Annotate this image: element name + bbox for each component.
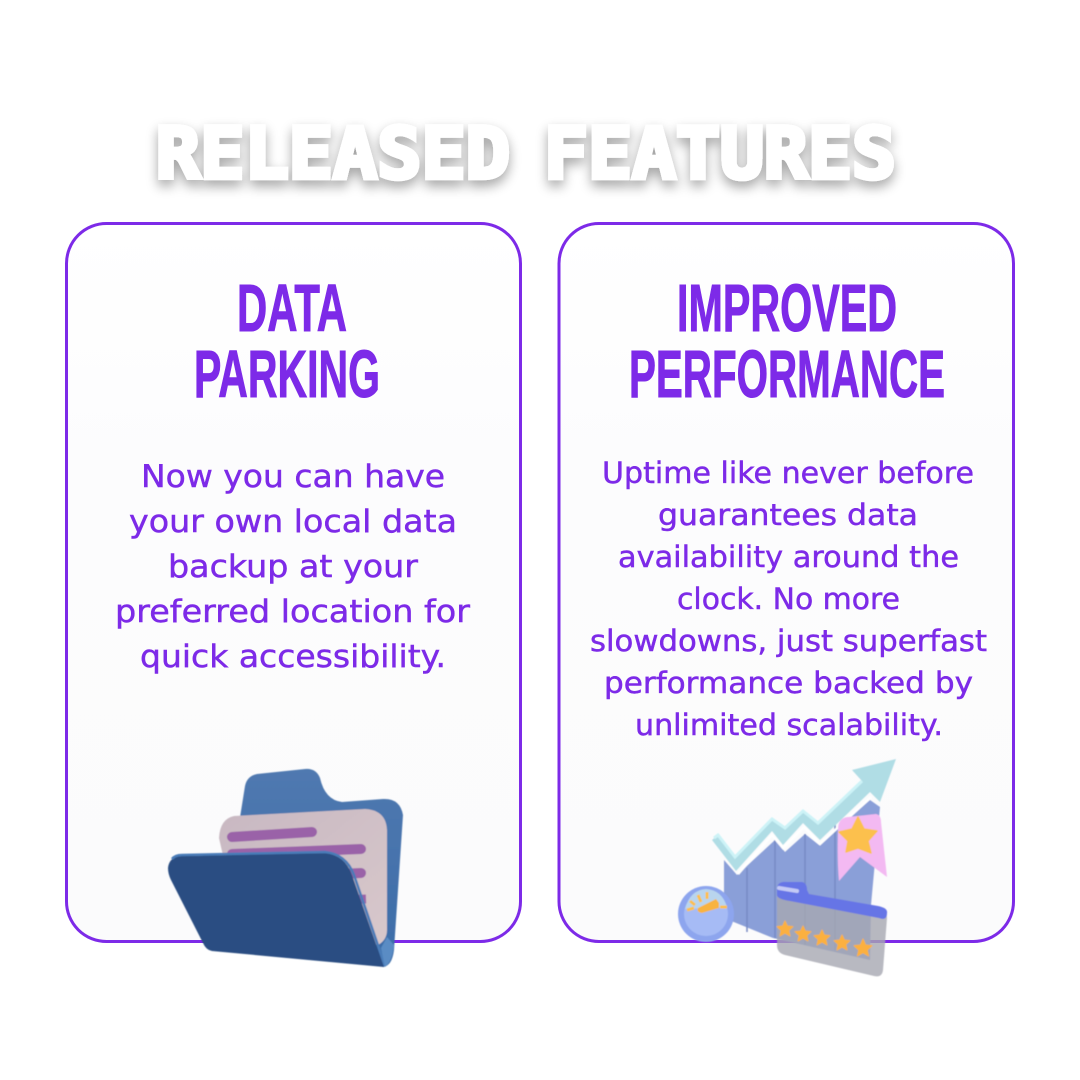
heading: data parking: DATA (237, 271, 347, 346)
text block: improved performance description: unlimited scalability. (635, 708, 943, 742)
heading: data parking (194, 271, 380, 412)
text block: improved performance description: availability around the (618, 540, 959, 574)
rating stars (777, 921, 872, 956)
icon: growth chart (678, 759, 896, 976)
chart columns (724, 800, 880, 960)
text block: improved performance description: performance backed by (604, 666, 973, 700)
bookmark (838, 814, 887, 881)
title: RELEASED (156, 113, 510, 195)
panel: improved performance (559, 224, 1014, 976)
panel: data parking (66, 224, 520, 967)
gauge (678, 886, 734, 942)
title (156, 113, 896, 195)
heading: improved performance: IMPROVED (677, 271, 897, 346)
text block: improved performance description (590, 456, 987, 742)
text block: improved performance description: slowdowns, just superfast (590, 624, 987, 658)
text block: data parking description: preferred location for (115, 594, 470, 630)
card outline left (66, 224, 520, 942)
heading: improved performance (629, 271, 945, 412)
text block: data parking description: your own local data (129, 504, 457, 540)
text block: data parking description: Now you can have (141, 459, 445, 495)
title: FEATURES (544, 113, 896, 195)
card outline right (559, 224, 1014, 942)
icon: folder (168, 769, 403, 967)
text block: improved performance description: guarantees data (658, 498, 918, 532)
arrow (712, 759, 896, 874)
text block: improved performance description: clock. No more (677, 582, 900, 616)
text block: data parking description: backup at your (168, 549, 418, 585)
text block: improved performance description: Uptime like never before (602, 456, 974, 490)
text block: data parking description (115, 459, 470, 675)
rating card (777, 882, 887, 976)
heading: data parking: PARKING (194, 337, 380, 412)
star on bookmark (839, 817, 877, 853)
text block: data parking description: quick accessibility. (140, 639, 446, 675)
